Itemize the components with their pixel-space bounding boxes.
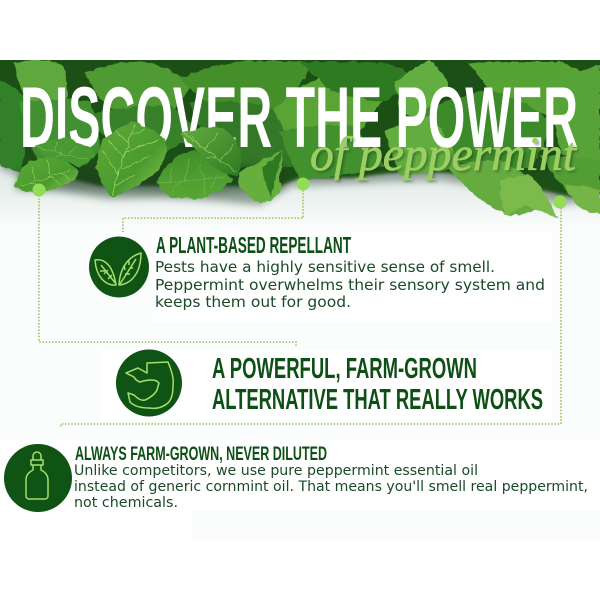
text block: repellant body — [155, 258, 545, 311]
node dot right — [554, 196, 566, 208]
icon: leaves — [89, 236, 149, 298]
node dot centre — [296, 178, 310, 190]
white text panels — [0, 232, 600, 540]
foreground leaves — [15, 122, 285, 205]
text block: farm-grown body: Unlike competitors, we use pure peppermint essential oil — [74, 463, 478, 479]
subtitle: of peppermint — [310, 128, 578, 181]
text block: farm-grown body: not chemicals. — [74, 495, 178, 511]
leaf: upper left — [34, 138, 96, 167]
icon: flexed arm — [116, 350, 182, 416]
text block: repellant body: Pests have a highly sensitive sense of smell. — [155, 258, 495, 276]
pale panel area — [0, 230, 600, 540]
connector: right dotted line — [61, 208, 561, 428]
text block: farm-grown body: instead of generic cornmint oil. That means you'll smell real peppermint, — [74, 479, 588, 495]
text block: repellant body: keeps them out for good. — [155, 293, 351, 311]
leaf: upper middle — [180, 127, 241, 177]
text block: repellant body: Peppermint overwhelms their sensory system and — [155, 276, 545, 294]
pale gradient behind the leaves — [0, 165, 600, 230]
connector: left dotted line — [39, 195, 296, 347]
heading: farm-grown never diluted: ALWAYS FARM-GROWN, NEVER DILUTED — [75, 443, 327, 465]
leaf: large centre — [96, 122, 166, 197]
text block: farm-grown body — [74, 463, 588, 511]
connector: centre dotted line — [123, 190, 303, 232]
leaf: far left — [15, 157, 80, 193]
icon: oil bottle — [4, 444, 72, 512]
leaf: folded — [239, 150, 283, 203]
banner shadow — [0, 162, 600, 210]
shadow under foreground leaves — [15, 165, 285, 205]
background leaves — [0, 60, 600, 180]
heading: plant-based repellant: A PLANT-BASED REPELLANT — [156, 232, 351, 258]
banner backdrop — [0, 50, 600, 200]
heading: powerful alternative — [212, 353, 543, 416]
subtitle shadow: of peppermint — [312, 130, 580, 183]
node dot left — [32, 184, 46, 196]
leaf: lower middle — [157, 150, 233, 199]
leaf banner — [0, 50, 600, 218]
right leaf cluster — [448, 155, 600, 218]
